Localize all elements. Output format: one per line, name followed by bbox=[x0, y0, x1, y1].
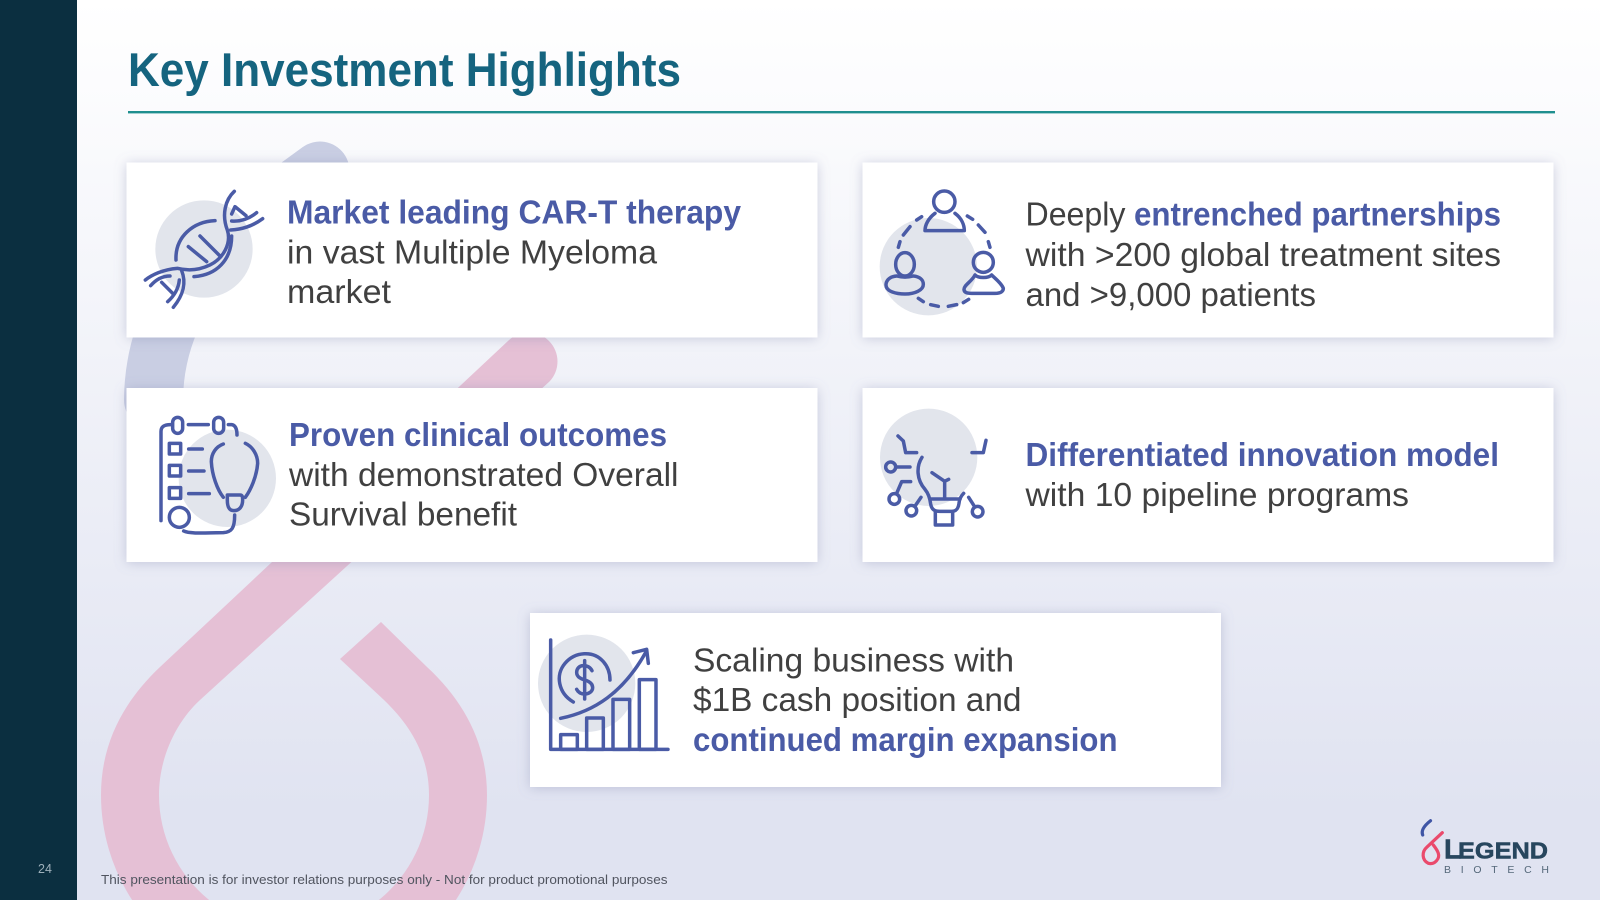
panel: entrenched partnerships bbox=[862, 162, 1554, 338]
logo: Legend Biotech: L bbox=[1444, 834, 1461, 865]
text: partnerships: Deeply bbox=[1026, 196, 1126, 232]
logo: Legend Biotech: EGEND bbox=[1458, 838, 1548, 864]
text: scaling: $1B cash position and bbox=[693, 681, 1022, 718]
text: partnerships: and >9,000 patients bbox=[1026, 276, 1316, 313]
watermark: pink logo loop bbox=[101, 333, 558, 900]
title: Key Investment Highlights bbox=[128, 43, 681, 96]
text: clinical outcomes: with demonstrated Overall bbox=[288, 456, 678, 493]
text: innovation bbox=[1024, 436, 1499, 513]
panel: market leading CAR-T therapy bbox=[126, 162, 818, 338]
text: market leading: in vast Multiple Myeloma bbox=[287, 234, 658, 270]
panel: differentiated innovation bbox=[862, 388, 1554, 562]
page number: 24 bbox=[38, 862, 52, 876]
text: clinical outcomes: Survival benefit bbox=[289, 496, 517, 532]
text: partnerships: with >200 global treatment sites bbox=[1024, 236, 1501, 273]
text: market leading: Market leading CAR-T therapy bbox=[287, 194, 742, 230]
text: scaling: Scaling business with bbox=[693, 642, 1014, 678]
icon: people network bbox=[880, 191, 1003, 315]
panel: proven clinical outcomes bbox=[126, 388, 818, 562]
panel: scaling business bbox=[530, 613, 1221, 787]
icon: growth chart with dollar bbox=[538, 635, 668, 749]
icon: DNA helix bbox=[145, 191, 263, 307]
text: clinical outcomes: Proven clinical outcomes bbox=[289, 416, 667, 453]
text: market leading bbox=[287, 194, 742, 310]
text: partnerships bbox=[1024, 196, 1501, 313]
sidebar bbox=[0, 0, 77, 900]
text: scaling bbox=[693, 642, 1118, 758]
text: clinical outcomes bbox=[288, 416, 678, 532]
watermark: blue logo stroke bbox=[154, 171, 320, 400]
logo: Legend Biotech bbox=[1422, 821, 1549, 876]
title rule bbox=[128, 111, 1555, 113]
footer disclaimer: This presentation is for investor relations purposes only - Not for product promotional purposes bbox=[101, 872, 668, 887]
text: market leading: market bbox=[287, 273, 391, 310]
text: partnerships: entrenched partnerships bbox=[1134, 196, 1501, 232]
logo: Legend Biotech: BIOTECH bbox=[1444, 864, 1549, 876]
text: scaling: continued margin expansion bbox=[693, 721, 1118, 758]
text: innovation: with 10 pipeline programs bbox=[1024, 476, 1409, 513]
icon: circuit lightbulb bbox=[880, 409, 986, 525]
text: innovation: Differentiated innovation model bbox=[1026, 436, 1499, 473]
icon: clipboard and stethoscope bbox=[161, 417, 276, 533]
